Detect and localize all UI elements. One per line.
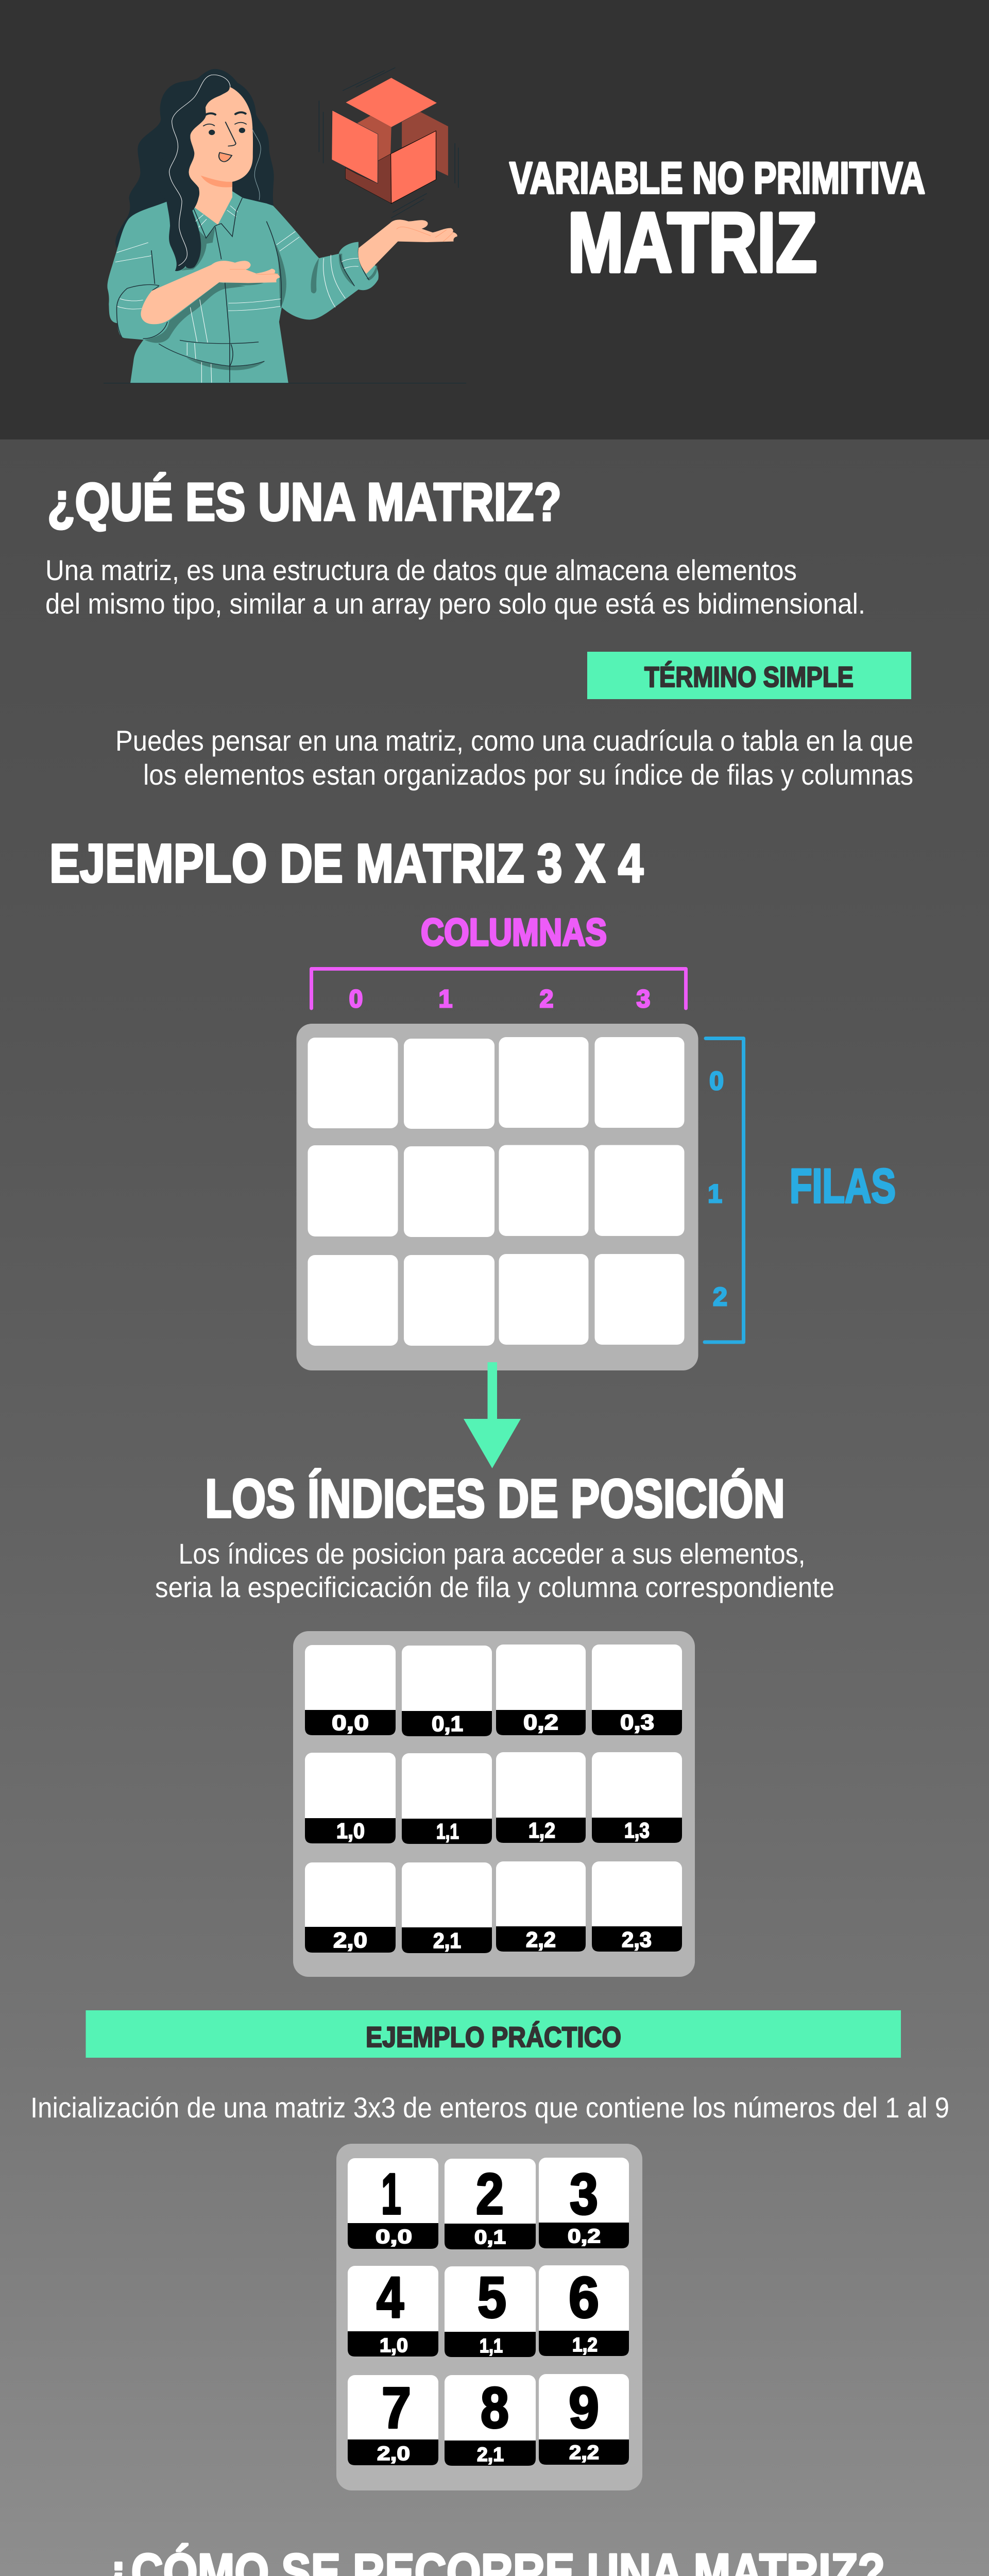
cell 9 bbox=[539, 2374, 629, 2465]
cell 5 bbox=[445, 2265, 536, 2357]
cell 1 bbox=[348, 2158, 438, 2249]
cell 1,0 bbox=[305, 1753, 396, 1843]
cell 7: 7 bbox=[382, 2376, 411, 2440]
cell 0,3: 0,3 bbox=[620, 1710, 654, 1734]
row indices bbox=[708, 1066, 727, 1311]
heading: ejemplo de matriz 3 x 4: EJEMPLO DE MATRIZ 3 X 4 bbox=[49, 833, 643, 894]
cell 2,2 bbox=[496, 1861, 586, 1952]
cell 4: 4 bbox=[377, 2265, 404, 2330]
header band bbox=[0, 0, 989, 439]
label: termino simple bbox=[587, 652, 911, 699]
text block: indices explanation: seria la especificicación de fila y columna correspondiente bbox=[155, 1571, 834, 1603]
cell 2,0: 2,0 bbox=[333, 1928, 367, 1952]
cell 1: 0,0 bbox=[376, 2226, 412, 2248]
panel: indices de posicion bbox=[293, 1631, 695, 1977]
bracket: columnas bbox=[311, 969, 686, 1008]
cell 1,3 bbox=[592, 1752, 682, 1843]
cell 3: 0,2 bbox=[568, 2226, 601, 2247]
column indices: 3 bbox=[637, 986, 650, 1013]
cell 1,0: 1,0 bbox=[336, 1819, 365, 1843]
cell 9: 2,2 bbox=[569, 2442, 599, 2464]
cell 3: 3 bbox=[570, 2162, 598, 2226]
heading: que es una matriz: ¿QUÉ ES UNA MATRIZ? bbox=[47, 472, 561, 532]
cell 5: 5 bbox=[478, 2265, 506, 2330]
cell 1,1 bbox=[402, 1753, 492, 1844]
illustration: woman presenting a cube bbox=[104, 69, 466, 383]
text block: simple explanation: los elementos estan organizados por su índice de filas y columnas bbox=[143, 758, 913, 791]
cell 2,1 bbox=[402, 1862, 492, 1953]
cell 5: 1,1 bbox=[480, 2335, 503, 2357]
text block: indices explanation bbox=[155, 1537, 834, 1603]
cell 1: 1 bbox=[381, 2162, 401, 2226]
heading: los indices de posicion: LOS ÍNDICES DE POSICIÓN bbox=[205, 1468, 785, 1529]
cell 0,0 bbox=[305, 1645, 396, 1735]
column indices: 1 bbox=[439, 986, 452, 1013]
panel: matriz 3 x 3 bbox=[336, 2144, 642, 2490]
banner: ejemplo practico bbox=[86, 2010, 901, 2058]
cell 2,2: 2,2 bbox=[526, 1927, 556, 1952]
cell 0,1 bbox=[402, 1646, 492, 1736]
row indices: 2 bbox=[713, 1282, 727, 1311]
cell 6 bbox=[539, 2265, 629, 2356]
cell 8: 2,1 bbox=[477, 2444, 504, 2466]
label: columnas: COLUMNAS bbox=[421, 911, 607, 954]
cell 6: 6 bbox=[569, 2265, 599, 2330]
cell 2: 2 bbox=[476, 2162, 504, 2226]
bracket: filas bbox=[705, 1039, 744, 1342]
row indices: 0 bbox=[709, 1066, 724, 1095]
column indices: 0 bbox=[349, 986, 363, 1013]
cell 4: 1,0 bbox=[380, 2335, 408, 2357]
cell 2,3: 2,3 bbox=[622, 1927, 652, 1952]
cell 0,2 bbox=[496, 1645, 586, 1735]
cell 2,0 bbox=[305, 1862, 396, 1953]
text block: definition: Una matriz, es una estructura de datos que almacena elementos bbox=[45, 554, 797, 586]
cell 8 bbox=[445, 2375, 536, 2466]
cell 0,2: 0,2 bbox=[523, 1710, 558, 1734]
column indices bbox=[349, 986, 650, 1013]
icon: exploded cube bbox=[319, 67, 458, 218]
panel: matriz 3 x 4 bbox=[297, 1024, 698, 1370]
cell 9: 9 bbox=[569, 2376, 599, 2440]
cell 1,2 bbox=[496, 1752, 586, 1843]
text block: simple explanation: Puedes pensar en una matriz, como una cuadrícula o tabla en la que bbox=[115, 724, 913, 757]
column indices: 2 bbox=[540, 986, 553, 1013]
cell 1,2: 1,2 bbox=[528, 1818, 555, 1842]
cell 0,0: 0,0 bbox=[332, 1710, 369, 1735]
label: termino simple: TÉRMINO SIMPLE bbox=[644, 660, 854, 693]
cell 3 bbox=[539, 2158, 629, 2248]
cell 2: 0,1 bbox=[474, 2227, 506, 2248]
cell 7 bbox=[348, 2375, 438, 2465]
text block: indices explanation: Los índices de posicion para acceder a sus elementos, bbox=[178, 1537, 806, 1570]
cell 2,3 bbox=[592, 1861, 682, 1952]
cell 0,1: 0,1 bbox=[432, 1711, 463, 1736]
cell 0,3 bbox=[592, 1645, 682, 1735]
cell 1,1: 1,1 bbox=[436, 1819, 459, 1843]
arrow: down bbox=[464, 1362, 521, 1468]
text block: definition: del mismo tipo, similar a un array pero solo que está es bidimensional. bbox=[45, 587, 865, 620]
row indices: 1 bbox=[708, 1179, 722, 1208]
text block: simple explanation bbox=[115, 724, 913, 791]
cell 7: 2,0 bbox=[377, 2443, 410, 2465]
cell 4 bbox=[348, 2265, 438, 2357]
title: matriz: MATRIZ bbox=[568, 195, 817, 290]
cell 8: 8 bbox=[481, 2376, 509, 2440]
cell 2,1: 2,1 bbox=[433, 1928, 461, 1953]
cell 2 bbox=[445, 2159, 536, 2249]
label: filas: FILAS bbox=[790, 1159, 896, 1213]
banner: ejemplo practico: EJEMPLO PRÁCTICO bbox=[366, 2021, 621, 2053]
cell 6: 1,2 bbox=[572, 2334, 598, 2356]
text block: definition bbox=[45, 554, 865, 620]
cell 1,3: 1,3 bbox=[624, 1818, 650, 1842]
